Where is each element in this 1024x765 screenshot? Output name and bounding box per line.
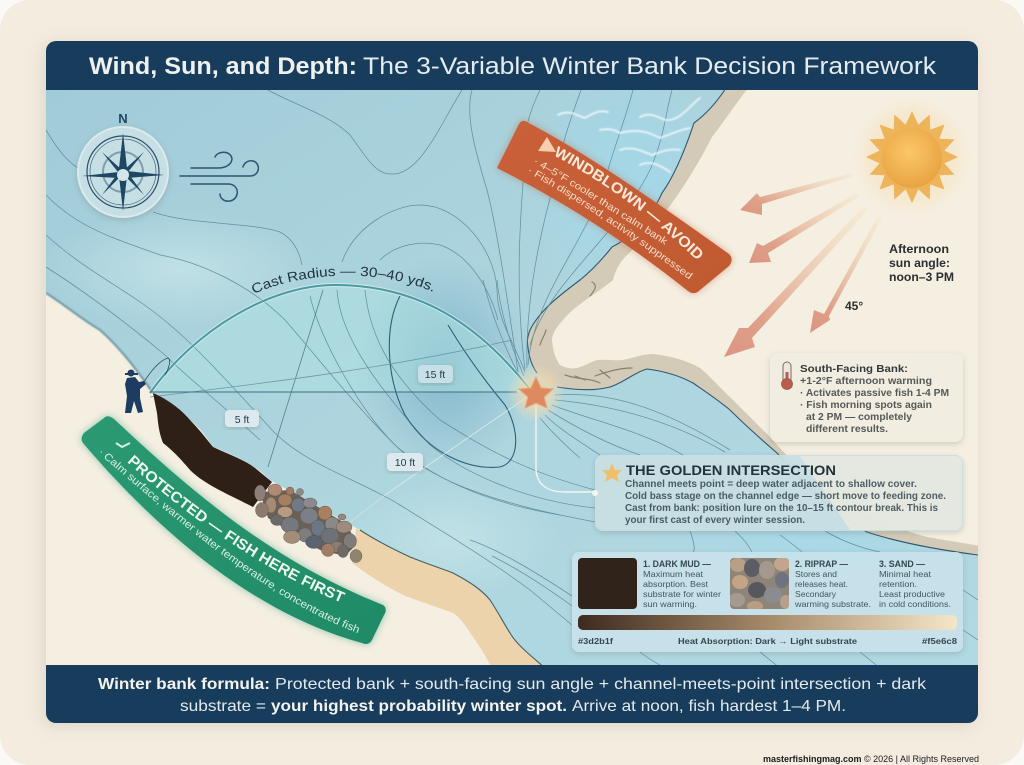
golden intersection panel: Cast from bank: position lure on the 10–15 ft contour break. This is bbox=[625, 502, 938, 514]
cast zone bbox=[152, 292, 516, 393]
south-facing bank panel: at 2 PM — completely bbox=[806, 411, 912, 423]
formula bar: Arrive at noon, fish hardest 1–4 PM. bbox=[572, 698, 846, 715]
windblown callout bbox=[494, 117, 736, 297]
credit line: masterfishingmag.com © 2026 | All Rights Reserved bbox=[763, 754, 979, 764]
depth label 5 ft bbox=[225, 410, 259, 427]
top rocky shore bbox=[515, 88, 980, 565]
cast radius label: Cast Radius — 30–40 yds. bbox=[252, 266, 433, 292]
gradient labels: #3d2b1f bbox=[578, 636, 613, 646]
golden intersection panel: your first cast of every winter session. bbox=[625, 514, 805, 526]
protected callout: · Calm surface, warmer water temperature, concentrated fish bbox=[100, 451, 359, 633]
substrate text 1: 1. DARK MUD — bbox=[643, 559, 711, 569]
icon: check bbox=[116, 443, 130, 447]
depth label 10 ft bbox=[387, 453, 423, 471]
sun angle label bbox=[889, 244, 954, 284]
substrate text 2 bbox=[794, 559, 871, 609]
substrate text 1: absorption. Best bbox=[643, 580, 709, 589]
substrate text 2: releases heat. bbox=[795, 580, 848, 589]
gradient labels: Heat Absorption: Dark → Light substrate bbox=[678, 636, 857, 646]
water shading bbox=[40, 60, 980, 620]
compass bbox=[78, 111, 168, 217]
depth label 15 ft bbox=[418, 365, 453, 383]
formula bar bbox=[46, 665, 978, 723]
sight lines bbox=[150, 290, 512, 467]
substrate text 3 bbox=[879, 559, 951, 609]
heat gradient bar bbox=[578, 615, 957, 630]
gradient labels bbox=[578, 636, 957, 646]
substrate legend panel bbox=[572, 552, 963, 652]
title bar bbox=[46, 41, 978, 90]
compass: N bbox=[118, 111, 128, 126]
rock texture on shore bbox=[540, 282, 632, 383]
windblown callout: WINDBLOWN — AVOID bbox=[556, 146, 702, 258]
golden intersection panel bbox=[592, 455, 963, 531]
formula bar: Winter bank formula: bbox=[98, 676, 270, 693]
gradient labels: #f5e6c8 bbox=[922, 636, 957, 646]
substrate text 3: in cold conditions. bbox=[879, 600, 951, 609]
sun angle label: sun angle: bbox=[889, 258, 950, 270]
south-facing bank panel bbox=[770, 353, 963, 442]
golden intersection panel: THE GOLDEN INTERSECTION bbox=[626, 462, 836, 478]
depth label 15 ft: 15 ft bbox=[425, 369, 445, 381]
south-facing bank panel: · Fish morning spots again bbox=[800, 399, 932, 411]
angler bbox=[125, 358, 170, 413]
windblown callout: · Fish dispersed, activity suppressed bbox=[529, 170, 693, 280]
wave marks bbox=[558, 98, 700, 172]
shoreline ink bbox=[46, 88, 978, 668]
substrate text 3: Least productive bbox=[879, 590, 946, 599]
substrate text 3: 3. SAND — bbox=[879, 559, 925, 569]
formula bar: your highest probability winter spot. bbox=[271, 698, 567, 715]
icon: gold star bbox=[602, 463, 622, 482]
substrate text 3: retention. bbox=[879, 580, 917, 589]
riprap swatch bbox=[730, 558, 789, 609]
icon: warning triangle bbox=[538, 137, 556, 152]
south-facing bank panel: different results. bbox=[806, 423, 888, 435]
sun angle label: noon–3 PM bbox=[889, 272, 954, 284]
substrate text 2: Secondary bbox=[795, 590, 836, 599]
sun bbox=[852, 97, 972, 217]
substrate text 1 bbox=[643, 559, 721, 609]
title bar: Wind, Sun, and Depth: bbox=[89, 53, 357, 80]
sand bank lower left bbox=[352, 528, 545, 668]
substrate text 3: Minimal heat bbox=[879, 570, 932, 579]
icon: wind bbox=[180, 152, 258, 201]
substrate text 2: Stores and bbox=[795, 570, 837, 579]
protected callout bbox=[77, 412, 390, 649]
golden star bbox=[507, 364, 565, 422]
title bar: The 3-Variable Winter Bank Decision Framework bbox=[363, 53, 937, 80]
riprap rocks bbox=[254, 484, 362, 562]
water bbox=[46, 88, 978, 668]
windblown callout: · 4–5°F cooler than calm bank bbox=[535, 160, 668, 245]
south-facing bank panel: +1-2°F afternoon warming bbox=[800, 375, 932, 387]
formula bar: Protected bank + south-facing sun angle + channel-meets-point intersection + dark bbox=[275, 676, 927, 693]
substrate text 1: substrate for winter bbox=[643, 590, 721, 599]
substrate text 2: 2. RIPRAP — bbox=[795, 559, 848, 569]
substrate text 1: Maximum heat bbox=[643, 570, 704, 579]
45 degree label: 45° bbox=[845, 299, 863, 313]
contour lines bbox=[46, 90, 978, 668]
map bbox=[40, 60, 980, 668]
mud bank bbox=[153, 393, 272, 507]
connector line bbox=[536, 405, 595, 492]
depth label 10 ft: 10 ft bbox=[395, 457, 415, 469]
protected callout: PROTECTED — FISH HERE FIRST bbox=[128, 454, 346, 602]
south-facing bank panel: · Activates passive fish 1-4 PM bbox=[800, 387, 949, 399]
formula bar: substrate = bbox=[180, 698, 266, 715]
sun angle label: Afternoon bbox=[889, 244, 949, 256]
golden intersection panel: Cold bass stage on the channel edge — short move to feeding zone. bbox=[625, 490, 946, 502]
depth label 5 ft: 5 ft bbox=[235, 414, 249, 426]
substrate text 2: warming substrate. bbox=[794, 600, 871, 609]
dark mud swatch bbox=[578, 558, 637, 609]
icon: thermometer bbox=[782, 362, 792, 390]
golden intersection panel: Channel meets point = deep water adjacent to shallow cover. bbox=[625, 478, 917, 490]
substrate text 1: sun warming. bbox=[643, 600, 697, 609]
south-facing bank panel: South-Facing Bank: bbox=[800, 363, 908, 375]
cast arc bbox=[150, 285, 532, 393]
sun rays bbox=[724, 173, 882, 357]
